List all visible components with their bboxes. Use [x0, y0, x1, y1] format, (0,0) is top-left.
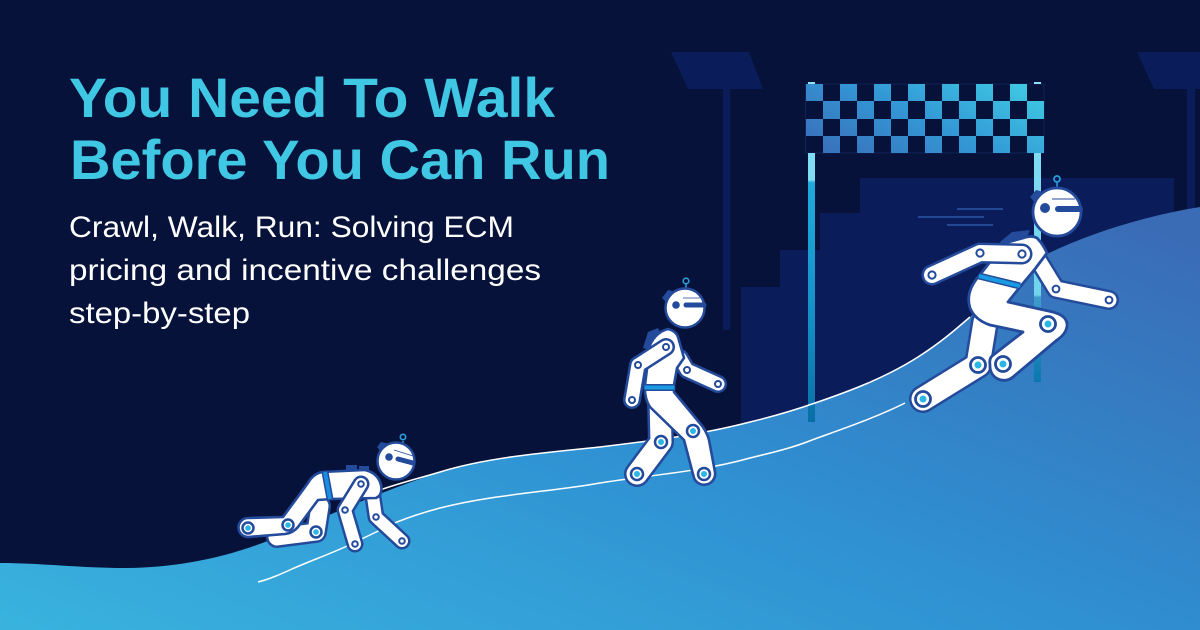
runner far leg	[916, 322, 986, 406]
runner far arm	[1037, 258, 1112, 303]
robot: walking	[629, 278, 721, 485]
finish line right pole	[1034, 82, 1041, 382]
speed lines	[918, 209, 1003, 225]
runner head	[1030, 176, 1081, 236]
crawler bolts	[346, 465, 369, 472]
walker front leg joints	[687, 425, 710, 480]
walker belt	[644, 384, 674, 391]
walker back arm	[680, 358, 721, 387]
runner belt	[979, 276, 1020, 286]
crawler leg joints	[242, 520, 294, 534]
crawler head	[377, 434, 414, 480]
title: Before You Can Run	[70, 128, 610, 191]
runner bolts	[1000, 230, 1030, 250]
checkered finish banner	[806, 84, 1044, 153]
finish line left pole	[808, 82, 815, 422]
subtitle: pricing and incentive challenges	[69, 254, 541, 287]
subtitle: step-by-step	[69, 297, 250, 330]
crawler back leg	[277, 506, 322, 538]
runner near leg joints	[996, 316, 1056, 372]
title: You Need To Walk	[69, 66, 556, 129]
track line upper	[380, 317, 970, 490]
track line lower	[258, 403, 905, 582]
walker bolts	[643, 328, 662, 350]
robot: crawling	[238, 434, 414, 547]
runner near arm	[928, 249, 1026, 279]
crawler near arm	[342, 481, 364, 547]
crawler far arm	[373, 497, 405, 544]
floodlight right	[1137, 52, 1200, 229]
runner torso and near leg	[969, 236, 1067, 380]
floodlight left	[671, 52, 763, 330]
walker back leg	[631, 400, 667, 480]
walker near arm	[629, 344, 669, 403]
hill	[0, 207, 1200, 630]
walker torso and front leg	[645, 329, 715, 485]
crawler torso and front leg	[238, 470, 381, 537]
subtitle: Crawl, Walk, Run: Solving ECM	[69, 211, 514, 244]
crawler belt	[325, 472, 330, 499]
walker head	[662, 278, 704, 328]
stadium stands	[741, 178, 1174, 440]
robot: running	[916, 176, 1112, 406]
